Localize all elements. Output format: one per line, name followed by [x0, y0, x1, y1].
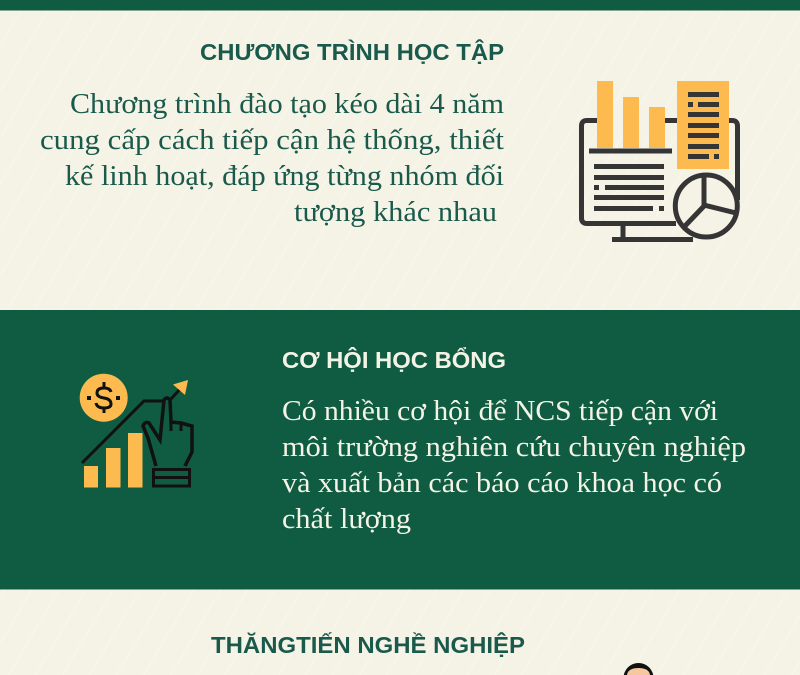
text block: scholarship description: Có nhiều cơ hội để NCS tiếp cận với [282, 396, 718, 427]
icon: person head [624, 663, 654, 675]
text block: program description: Chương trình đào tạo kéo dài 4 năm [70, 89, 504, 120]
heading: cơ hội học bổng: CƠ HỘI HỌC BỔNG [282, 346, 506, 373]
text block: program description: kế linh hoạt, đáp ứng từng nhóm đối [65, 161, 504, 192]
text block: scholarship description: chất lượng [282, 504, 411, 535]
text block: program description: cung cấp cách tiếp cận hệ thống, thiết [40, 125, 504, 156]
text block: scholarship description: và xuất bản các báo cáo khoa học có [282, 468, 722, 499]
panel: thăng tiến nghề nghiệp [211, 631, 654, 675]
heading: thăng tiến nghề nghiệp: THĂNGTIẾN NGHỀ NGHIỆP [211, 631, 525, 658]
text block: program description [40, 89, 504, 228]
text block: scholarship description [282, 396, 746, 535]
heading: chương trình học tập: CHƯƠNG TRÌNH HỌC TẬP [200, 38, 504, 65]
text block: program description: tượng khác nhau [294, 197, 497, 228]
icon: monitor with charts and document [582, 81, 738, 242]
text block: scholarship description: môi trường nghiên cứu chuyên nghiệp [282, 432, 746, 463]
icon: rising chart with coin and hand [80, 374, 192, 488]
panel: chương trình học tập [40, 38, 738, 242]
panel: cơ hội học bổng [0, 310, 800, 590]
top green band [0, 0, 800, 10]
